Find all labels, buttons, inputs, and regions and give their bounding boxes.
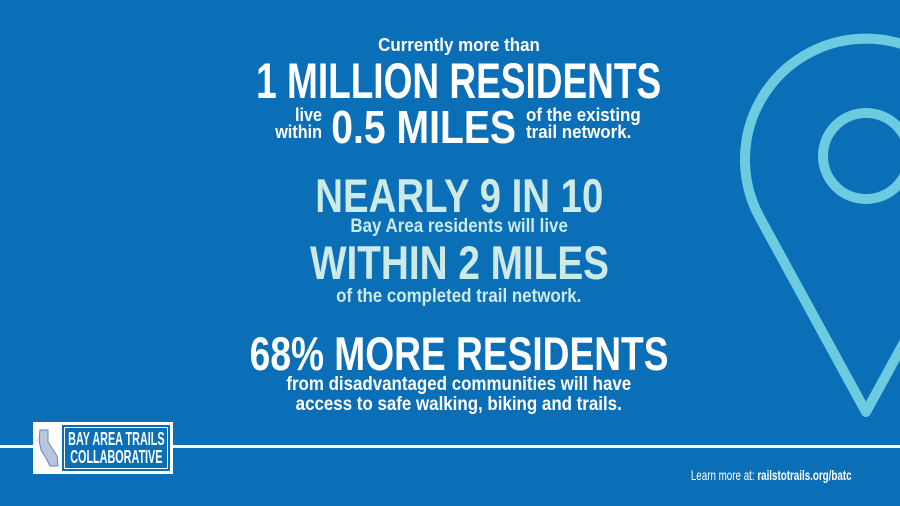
headline: 1 million residents: 1 MILLION RESIDENTS [257,53,661,109]
text: live within [275,105,322,142]
text: of the existing trail network [526,105,641,142]
text: bay area residents: Bay Area residents will live [350,216,568,237]
stat row: 0.5 miles [275,101,641,153]
headline: nearly 9 in 10: NEARLY 9 IN 10 [315,169,603,222]
divider line [0,445,900,448]
text: live within: within [275,122,322,142]
text: of the existing trail network: trail network. [526,122,631,142]
text: completed network: of the completed trail network. [336,286,582,307]
text: 0.5 miles: 0.5 MILES [332,101,516,153]
headline: within 2 miles: WITHIN 2 MILES [309,236,609,289]
text: disadvantaged communities: access to safe walking, biking and trails. [296,394,622,415]
intro text: Currently more than [378,35,540,55]
text: disadvantaged communities: from disadvantaged communities will have [287,374,631,395]
text: live within: live [295,105,322,125]
logo: bay area trails collaborative [33,422,173,474]
logo text box: COLLABORATIVE [70,447,162,467]
headline: 68% more residents: 68% MORE RESIDENTS [250,327,668,380]
text: of the existing trail network: of the existing [526,105,641,125]
icon: california [38,430,58,466]
footer link: Learn more at: railstotrails.org/batc [691,467,852,483]
text: disadvantaged communities [286,374,631,415]
logo text box: BAY AREA TRAILS [68,429,164,449]
logo text box [62,425,170,471]
